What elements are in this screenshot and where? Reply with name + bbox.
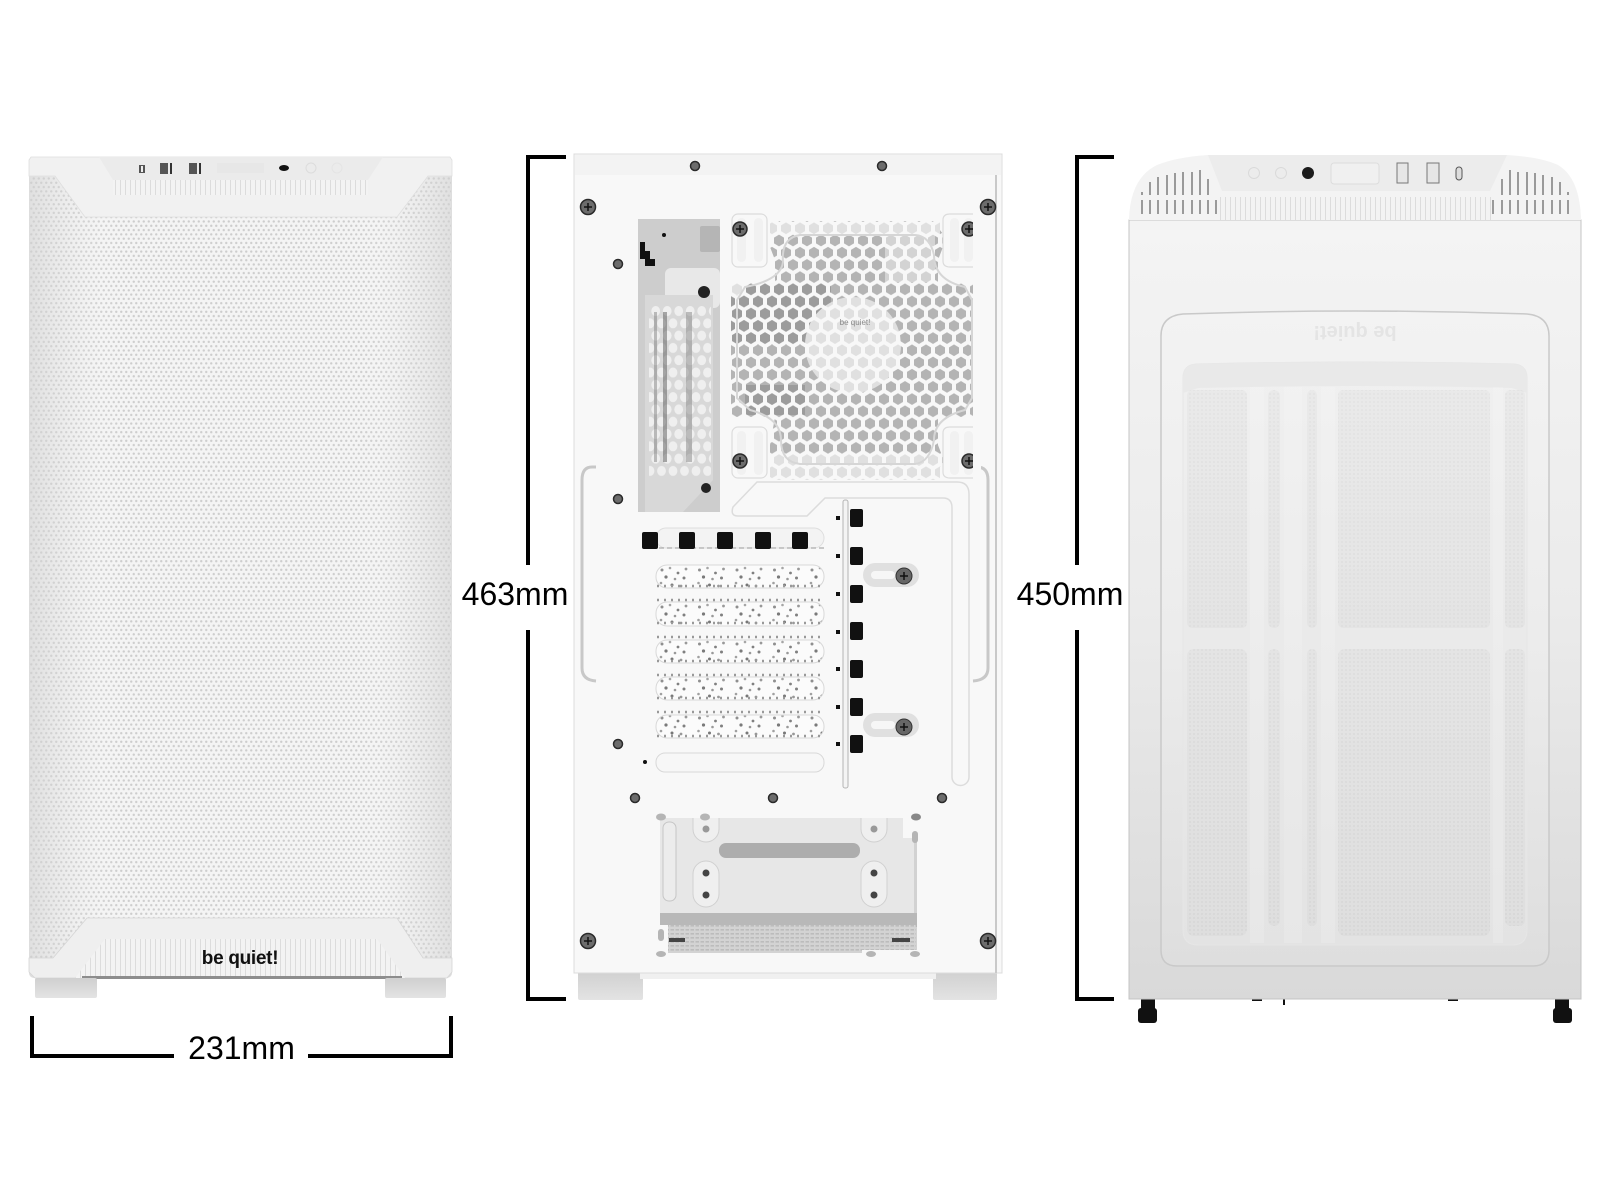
PSU window (638, 219, 720, 512)
cage corner tabs (655, 812, 922, 959)
lighter top rows (770, 222, 940, 234)
side feet (1138, 999, 1572, 1023)
panel: front view of case (29, 157, 452, 998)
vent panels lower (1187, 649, 1525, 936)
dimension: height 463mm (462, 157, 568, 999)
lighter bottom rows (770, 454, 940, 480)
dimension: height 463mm: 463mm (462, 576, 568, 612)
cage plate (660, 818, 914, 913)
side handle right (973, 467, 988, 681)
embossed logo: be quiet! (1313, 321, 1397, 343)
recess top band (1183, 362, 1527, 393)
right foot (385, 978, 446, 998)
panel: side view of case (1129, 155, 1581, 1023)
side top cap (1129, 155, 1581, 220)
thumb screws (863, 563, 919, 737)
cage long slot (719, 843, 860, 858)
lower drive cage window (655, 812, 922, 959)
top band (575, 155, 1001, 175)
vent panels upper (1187, 390, 1525, 628)
PCI black clips vertical (836, 509, 863, 753)
dotted vent rows between slots (657, 586, 824, 736)
fan mounting slots (732, 214, 973, 478)
light strips (1250, 387, 1503, 943)
screw crosses (584, 203, 992, 945)
rear feet (578, 970, 997, 1000)
side top ribs (1218, 197, 1495, 220)
lighter upper right zone (885, 234, 935, 282)
cage side slot (663, 822, 676, 901)
side vent slits right (1493, 170, 1568, 214)
front bottom ribbed recess (75, 939, 405, 978)
plate covering right fan screws (973, 220, 981, 470)
lighter left and right ends (731, 283, 745, 295)
front top recess with ports (99, 157, 383, 195)
screws (580, 162, 996, 948)
rear body (574, 154, 1002, 973)
dimension: depth 450mm (1017, 157, 1123, 999)
expansion slot vents (643, 528, 824, 772)
side recessed vent area (1183, 362, 1527, 945)
fan grille (731, 221, 973, 480)
dimension: depth 450mm: 450mm (1017, 576, 1123, 612)
side panel inset (1161, 311, 1549, 966)
vent teeth (82, 976, 402, 979)
side body (1129, 220, 1581, 999)
slot dashed line (643, 547, 824, 549)
front mesh panel (29, 157, 452, 978)
cage tab holes (656, 814, 921, 957)
cage shadow (660, 913, 917, 927)
right edge rail (995, 175, 997, 973)
fan frame outline (737, 235, 972, 464)
slot covers black clips horizontal (642, 532, 808, 549)
expansion plate (645, 286, 713, 512)
cable routing outline (732, 482, 969, 786)
fan hub (805, 297, 901, 393)
side vent slits left (1142, 170, 1216, 214)
panel: rear view of case (574, 154, 1002, 1000)
front bottom cap (29, 918, 452, 978)
cage mesh (668, 925, 916, 953)
cage mounting holes (669, 826, 910, 942)
cage mounting pads (693, 818, 887, 907)
dimension: width 231mm (32, 1016, 451, 1066)
PCI bracket rail (843, 500, 848, 788)
darker left blade zone (731, 283, 831, 345)
left foot (35, 978, 97, 998)
side top ports (1248, 163, 1462, 184)
dimension: width 231mm: 231mm (188, 1030, 295, 1066)
side top recess (1208, 155, 1507, 191)
fan logo: be quiet! (840, 318, 870, 327)
darker lower blade zone (745, 385, 805, 415)
front top cap (29, 157, 452, 217)
side handle left (582, 467, 596, 681)
logo: be quiet! (202, 948, 278, 969)
